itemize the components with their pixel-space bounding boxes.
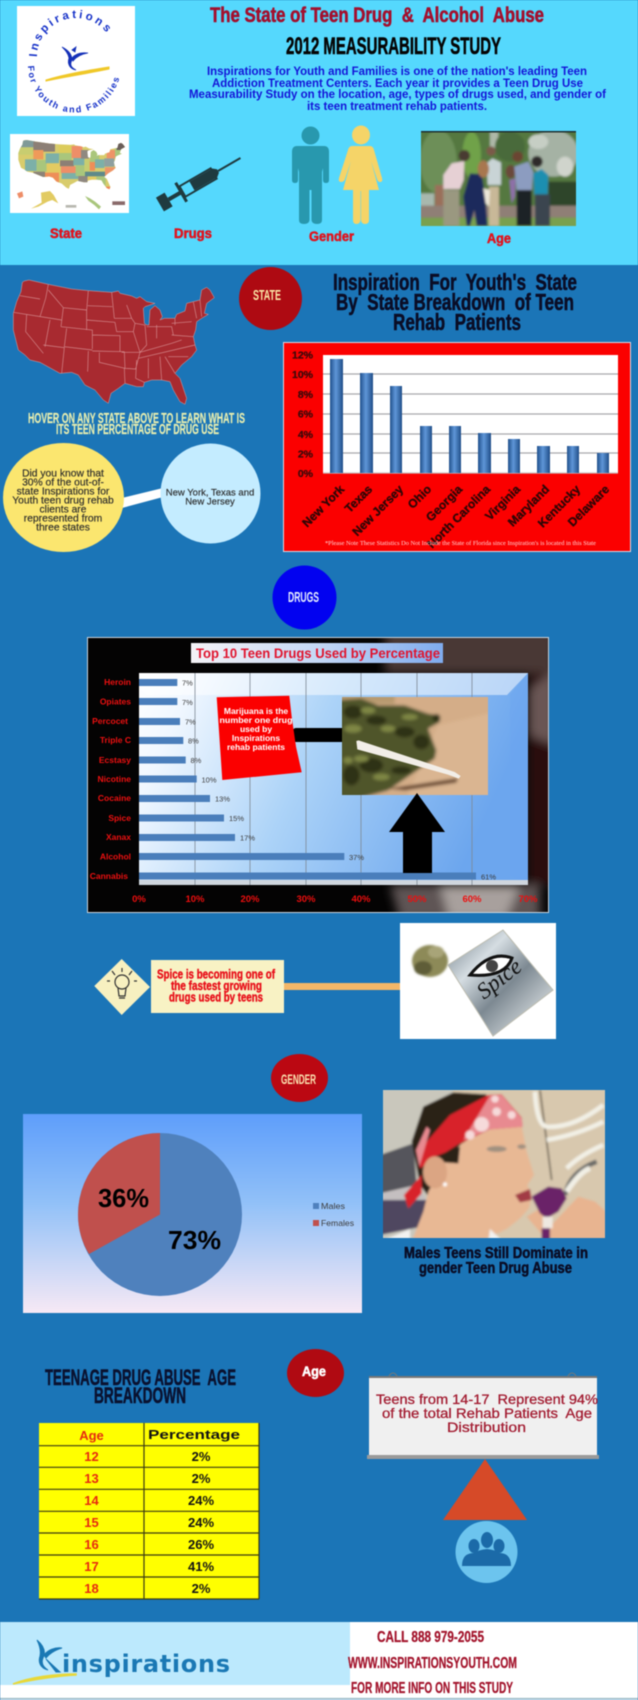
connector between circles: [122, 488, 163, 508]
callout: yellow circle: Did you know that: [22, 468, 104, 480]
bar chart: state breakdown: 4%: [298, 429, 314, 441]
table: age percentages: 18: [84, 1581, 99, 1596]
callout: spice text: [151, 960, 284, 1013]
bar chart: state breakdown: New Jersey: [350, 482, 406, 539]
contact details: WWW.INSPIRATIONSYOUTH.COM: [348, 1655, 517, 1672]
chart: top 10 teen drugs: Nicotine: [97, 774, 131, 784]
chart: top 10 teen drugs: Xanax: [106, 832, 131, 842]
callout: spice text: drugs used by teens: [169, 990, 263, 1004]
panel: drugs section: [88, 566, 558, 1039]
chart: top 10 teen drugs: 10%: [202, 776, 217, 784]
table: age percentages: Age: [79, 1428, 104, 1443]
table: age percentages: 15: [84, 1515, 99, 1530]
table: age percentages: 17: [84, 1559, 99, 1574]
chart: top 10 teen drugs: 13%: [215, 794, 230, 804]
callout: light blue circle: [160, 444, 260, 544]
chart: top 10 teen drugs: 7%: [182, 678, 193, 688]
heading: age breakdown: TEENAGE DRUG ABUSE AGE: [45, 1365, 236, 1390]
logo: inspirations: inspirations: [62, 1650, 230, 1678]
text: hover instruction: [28, 410, 245, 438]
horizontal bars: [139, 679, 476, 880]
black connector: [292, 728, 345, 742]
callout: spice text: Spice is becoming one of: [157, 968, 276, 982]
intro paragraph: Addiction Treatment Centers. Each year it provides a Teen Drug Use: [212, 76, 583, 90]
connector bar: [284, 983, 400, 990]
icon: lightbulb: [94, 959, 150, 1015]
callout: marijuana note: rehab patients: [227, 742, 285, 752]
table: age percentages: 2%: [192, 1449, 211, 1464]
intro paragraph: Inspirations for Youth and Families is one of the nation's leading Teen: [207, 64, 587, 78]
callout: light blue circle: New Jersey: [185, 496, 235, 508]
callout: yellow circle: 30% of the out-of-: [22, 478, 104, 488]
callout: yellow circle: Youth teen drug rehab: [12, 496, 114, 506]
badge: Age: [287, 1349, 344, 1397]
legend: [313, 1201, 354, 1228]
arrow: up to photo: [389, 793, 445, 873]
chart: top 10 teen drugs: 61%: [481, 872, 496, 882]
callout: yellow circle: [3, 443, 124, 552]
badge: Age: Age: [302, 1363, 326, 1379]
legend: Females: [321, 1218, 354, 1228]
title: The State of Teen Drug & Alcohol Abuse: [210, 4, 544, 27]
subtitle: 2012 MEASURABILITY STUDY: [286, 33, 501, 60]
table: age percentages: 12: [84, 1449, 99, 1464]
text: hover instruction: HOVER ON ANY STATE ABOVE TO LEARN WHAT IS: [28, 410, 245, 427]
table: age percentages: 16: [84, 1537, 99, 1552]
chart: top 10 teen drugs: Opiates: [100, 696, 131, 706]
panel: state section: [3, 267, 630, 552]
icon: male figure: [292, 126, 329, 224]
heading: state breakdown: Rehab Patients: [393, 309, 521, 335]
intro paragraph: Measurability Study on the location, age, types of drugs used, and gender of: [189, 87, 607, 101]
table: age percentages: 24%: [188, 1493, 214, 1508]
triangle support: [443, 1459, 527, 1520]
callout: marijuana note: Inspirations: [232, 733, 280, 743]
text: hover instruction: ITS TEEN PERCENTAGE OF DRUG USE: [56, 421, 219, 438]
chart: top 10 teen drugs: 10%: [185, 894, 205, 905]
caption: male teens: gender Teen Drug Abuse: [419, 1260, 572, 1277]
bar chart: state breakdown: *Please Note These Statistics Do Not Include the State of Florida since Inspiration's is located in this State: [325, 540, 596, 547]
logo: Inspirations for Youth and Families: Inspirations: [28, 9, 111, 57]
logo: Inspirations for Youth and Families: For Youth and Families: [27, 65, 120, 114]
chart: top 10 teen drugs: 8%: [190, 756, 202, 765]
chart: top 10 teen drugs: 7%: [182, 698, 193, 707]
callout: yellow circle: three states: [36, 522, 90, 534]
chart title: Top 10 Teen Drugs Used by Percentage: [196, 645, 440, 661]
chart: top 10 teen drugs: 0%: [132, 894, 146, 905]
heading: state breakdown: [333, 269, 577, 335]
chart: top 10 teen drugs: [88, 630, 558, 920]
bar chart: state breakdown: Delaware: [565, 482, 612, 529]
panel: age section: [39, 1349, 599, 1599]
chart: top 10 teen drugs: 60%: [462, 894, 482, 905]
table: age percentages: 24%: [188, 1515, 214, 1530]
chart: top 10 teen drugs: 30%: [296, 894, 316, 905]
badge: STATE: [239, 267, 302, 330]
callout: light blue circle: New York, Texas and: [166, 488, 254, 498]
panel: gender section: [23, 1054, 610, 1313]
sign: 14-17 represent 94%: Teens from 14-17 Represent 94%: [376, 1391, 598, 1407]
chart: top 10 teen drugs: Cannabis: [90, 871, 128, 881]
intro paragraph: its teen treatment rehab patients.: [307, 99, 487, 113]
callout: yellow circle: represented from: [24, 514, 102, 524]
badge: GENDER: [271, 1054, 328, 1102]
table: age percentages: 26%: [188, 1537, 214, 1552]
bar chart: state breakdown: [284, 342, 630, 552]
bar chart: state breakdown: New York: [299, 482, 347, 530]
label: Gender: Gender: [309, 228, 355, 244]
icon: colored US state map: [10, 134, 129, 213]
bar chart: state breakdown: Georgia: [423, 482, 465, 524]
chart: top 10 teen drugs: Percocet: [92, 716, 128, 726]
photo: group of teens: [420, 130, 577, 227]
badge: STATE: STATE: [253, 287, 281, 304]
bar chart: state breakdown: Texas: [342, 482, 375, 516]
chart: top 10 teen drugs: 8%: [188, 736, 199, 746]
heading: age breakdown: [45, 1365, 236, 1408]
icon: people circle: [456, 1521, 518, 1583]
bar chart: state breakdown: Kentucky: [535, 482, 583, 530]
chart: top 10 teen drugs: 50%: [407, 894, 427, 905]
callout: yellow circle: state Inspirations for: [17, 486, 110, 498]
chart: top 10 teen drugs: Triple C: [100, 735, 131, 745]
sign: 14-17 represent 94%: Distribution: [447, 1419, 526, 1435]
callout: marijuana note: used by: [240, 724, 272, 734]
bar chart: state breakdown: Ohio: [405, 482, 434, 511]
pie chart: gender split: [23, 1114, 362, 1313]
chart: top 10 teen drugs: Cocaine: [98, 793, 131, 803]
caption: male teens: Males Teens Still Dominate in: [404, 1245, 588, 1262]
label: Drugs: Drugs: [174, 225, 212, 241]
contact details: FOR MORE INFO ON THIS STUDY: [351, 1680, 513, 1697]
callout: spice text: the fastest growing: [171, 979, 262, 993]
bar chart: state breakdown: 0%: [298, 468, 314, 480]
sign: 14-17 represent 94%: of the total Rehab Patients Age: [382, 1405, 592, 1421]
icon: female figure: [339, 126, 382, 224]
bar chart: state breakdown: 8%: [298, 389, 314, 401]
bar chart: state breakdown: Maryland: [505, 482, 552, 529]
pie chart: gender split: 73%: [168, 1225, 221, 1255]
logo: Inspirations for Youth and Families: [16, 5, 136, 117]
table: age percentages: 13: [84, 1471, 99, 1486]
badge: GENDER: GENDER: [281, 1072, 316, 1087]
chart: top 10 teen drugs: 40%: [351, 894, 371, 905]
badge: DRUGS: DRUGS: [288, 590, 319, 606]
tip: spice: [94, 923, 556, 1039]
bar chart: state breakdown: North Carolina: [424, 482, 493, 551]
callout: marijuana note: Marijuana is the: [224, 706, 288, 716]
callout: yellow circle: clients are: [40, 504, 87, 516]
map: United States: [13, 280, 214, 404]
table: age percentages: 41%: [188, 1559, 214, 1574]
chart: top 10 teen drugs: 20%: [240, 894, 260, 905]
bar chart: state breakdown: 10%: [292, 369, 314, 381]
caption: male teens: [404, 1245, 588, 1277]
legend: Males: [321, 1201, 345, 1211]
heading: age breakdown: BREAKDOWN: [94, 1383, 186, 1408]
chart: top 10 teen drugs: Ecstasy: [99, 755, 131, 765]
table: age percentages: [39, 1423, 259, 1599]
chart: top 10 teen drugs: Spice: [108, 813, 131, 823]
label: State: State: [50, 225, 82, 241]
bar chart: state breakdown: 12%: [292, 350, 314, 362]
photo: marijuana joint: [341, 696, 489, 796]
chart: top 10 teen drugs: 37%: [349, 853, 364, 862]
chart: top 10 teen drugs: 7%: [185, 718, 196, 726]
label: Age: Age: [487, 230, 511, 246]
chart: top 10 teen drugs: Alcohol: [100, 852, 131, 862]
sign: 14-17 represent 94%: [367, 1373, 599, 1459]
bar chart: state breakdown: 6%: [298, 408, 314, 420]
bar chart: state breakdown: 2%: [298, 448, 314, 460]
chart: top 10 teen drugs: 15%: [229, 814, 244, 823]
icon: syringe: [154, 148, 246, 214]
intro paragraph: [189, 64, 607, 113]
photo: spice packet: [400, 923, 556, 1039]
contact details: CALL 888 979-2055: [377, 1629, 484, 1646]
table: age percentages: 2%: [192, 1471, 211, 1486]
table: age percentages: 2%: [192, 1581, 211, 1596]
chart: top 10 teen drugs: 70%: [518, 894, 538, 905]
pie chart: gender split: 36%: [98, 1183, 149, 1213]
panel: header band: [0, 0, 638, 266]
chart: top 10 teen drugs: Heroin: [104, 677, 131, 687]
table: age percentages: Percentage: [148, 1427, 240, 1442]
table: age percentages: 14: [84, 1493, 99, 1508]
callout: marijuana note: [217, 696, 302, 780]
panel: footer: [0, 1622, 638, 1700]
badge: DRUGS: [272, 566, 336, 630]
photo: spice packet: Spice: [472, 954, 526, 1004]
photo: teen male with inhaler: [380, 1085, 610, 1242]
bar chart: state breakdown: Virginia: [482, 482, 523, 523]
callout: marijuana note: number one drug: [220, 715, 292, 725]
logo: inspirations: [0, 1622, 350, 1685]
chart: top 10 teen drugs: 17%: [240, 834, 255, 842]
contact details: [348, 1629, 517, 1697]
